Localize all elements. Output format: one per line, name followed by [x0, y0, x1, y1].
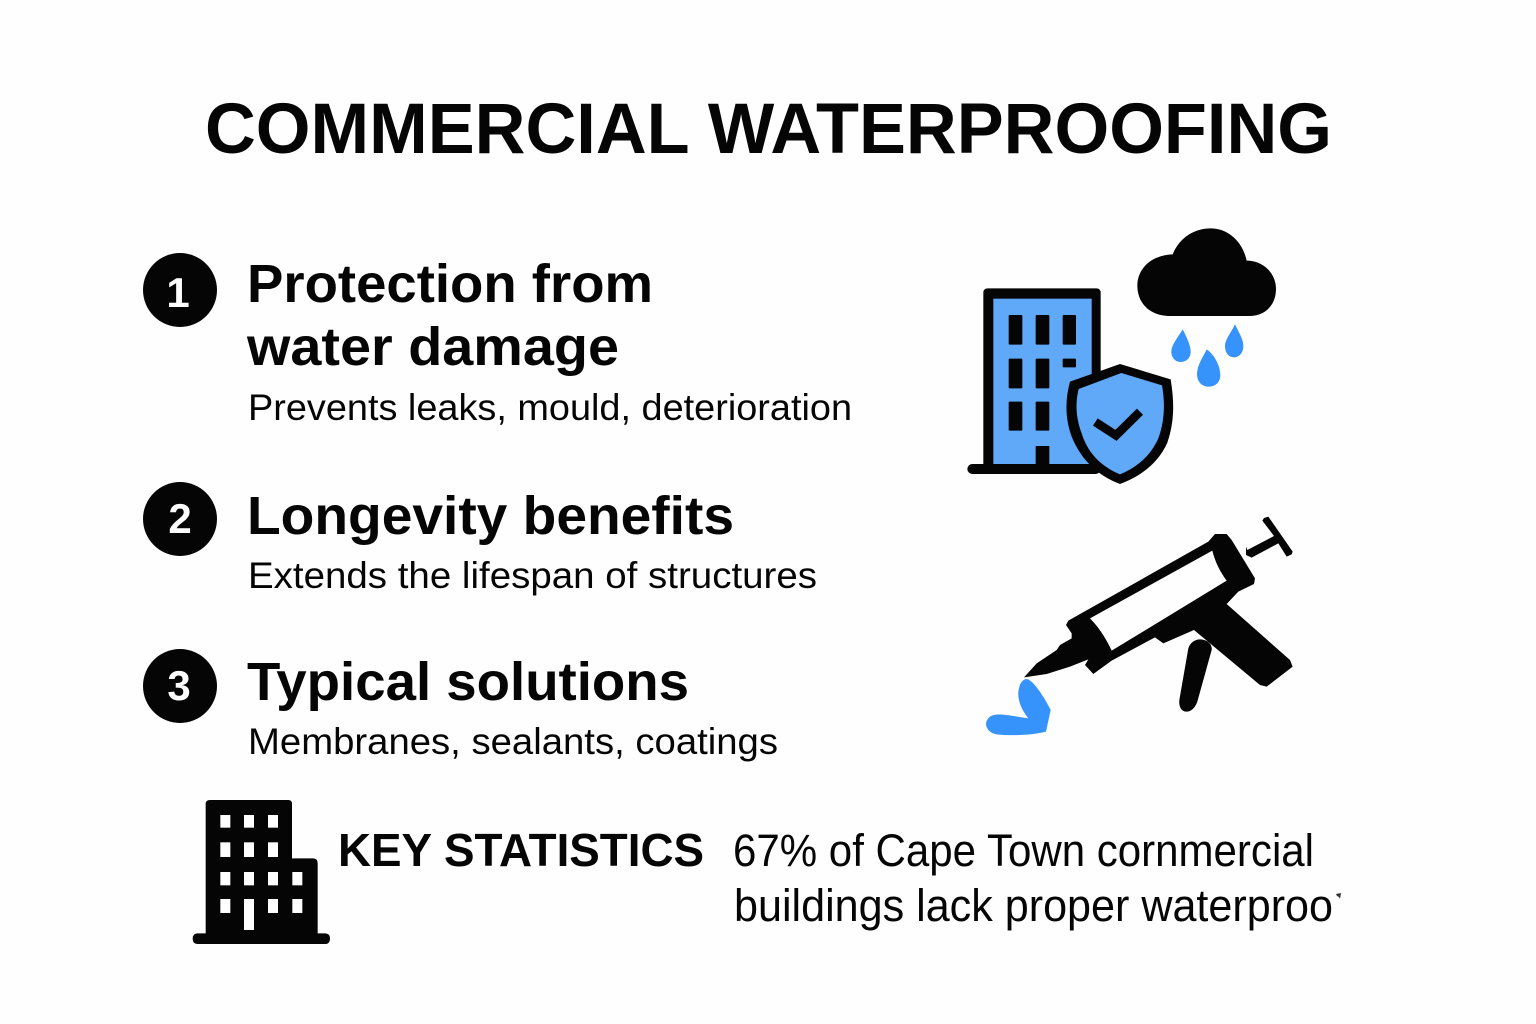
item 1: protection from water damage: [143, 253, 852, 428]
icon: office building: [193, 800, 330, 944]
statistic text: buildings lack proper waterproo: [734, 880, 1333, 931]
statistic text: 67% of Cape Town cornmercial: [733, 825, 1314, 876]
heading 2: Longevity benefits: [247, 486, 734, 546]
key statistics heading: KEY STATISTICS: [338, 824, 704, 876]
number badge 2: 2: [168, 495, 192, 542]
description 2: Extends the lifespan of structures: [248, 555, 817, 596]
item 3: typical solutions: [143, 649, 778, 762]
gun trigger: [1179, 639, 1212, 712]
number badge 1: [143, 253, 217, 327]
item 2: longevity benefits: [143, 482, 817, 596]
icon: building with shield and rain cloud: [967, 228, 1276, 484]
rain drops: [1171, 324, 1243, 387]
statistic text: [733, 825, 1341, 931]
gun body: [1024, 534, 1293, 687]
gun plunger handle: [1246, 517, 1293, 558]
description 3: Membranes, sealants, coatings: [248, 721, 778, 762]
number badge 2: [143, 482, 217, 556]
number badge 1: 1: [166, 269, 190, 316]
sealant blob: [986, 679, 1051, 735]
heading 1: water damage: [246, 317, 619, 377]
shield with check: [1066, 364, 1173, 484]
building: [967, 288, 1101, 474]
number badge 3: [143, 649, 217, 723]
description 1: Prevents leaks, mould, deterioration: [248, 387, 852, 428]
heading 1: [246, 254, 653, 377]
icon: caulking gun: [986, 517, 1293, 735]
rain cloud: [1137, 228, 1276, 316]
heading 1: Protection from: [247, 254, 653, 314]
title: COMMERCIAL WATERPROOFING: [205, 90, 1332, 169]
number badge 3: 3: [167, 662, 191, 709]
heading 3: Typical solutions: [247, 652, 689, 712]
